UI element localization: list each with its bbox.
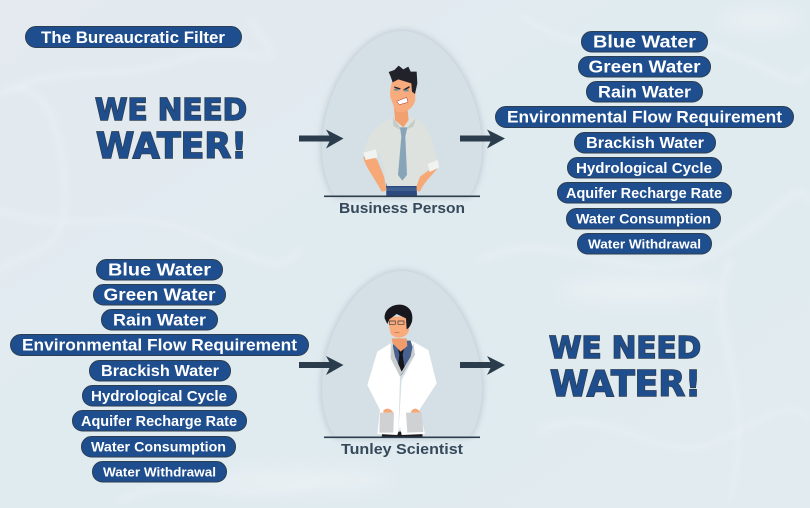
title pill: The Bureaucratic Filter — [41, 29, 226, 47]
jargon list: right: Blue Water — [593, 32, 696, 52]
jargon list: left: Hydrological Cycle — [91, 388, 227, 405]
jargon list: left: Blue Water — [108, 260, 211, 280]
baseline and label: scientist: Tunley Scientist — [341, 442, 463, 458]
jargon list: right: Water Withdrawal — [588, 236, 701, 252]
arrow: top left — [299, 130, 344, 148]
arrow: bottom right — [460, 356, 505, 375]
heading: we need water top: WE NEED — [95, 93, 247, 128]
jargon list: left: Aquifer Recharge Rate — [81, 414, 237, 430]
icon: scientist — [367, 305, 437, 437]
jargon list: right: Water Consumption — [576, 212, 711, 226]
baseline and label: business person: Business Person — [339, 201, 465, 217]
jargon list: right: Rain Water — [598, 82, 691, 102]
jargon list: left: Green Water — [104, 284, 216, 304]
egg: business person — [322, 31, 482, 196]
egg: scientist — [322, 271, 482, 437]
jargon list: right: Brackish Water — [586, 135, 704, 152]
jargon list: right: Environmental Flow Requirement — [507, 108, 783, 126]
heading: we need water bottom: WE NEED — [549, 331, 701, 366]
jargon list: left: Water Withdrawal — [103, 464, 216, 480]
jargon list: left: Rain Water — [113, 310, 206, 330]
jargon list: left — [10, 260, 308, 482]
heading: we need water bottom — [549, 331, 701, 405]
jargon list: right: Hydrological Cycle — [576, 160, 712, 177]
icon: business person — [363, 66, 439, 196]
jargon list: left: Environmental Flow Requirement — [22, 336, 298, 354]
heading: we need water top: WATER! — [96, 126, 247, 167]
arrow: bottom left — [299, 356, 344, 375]
jargon list: right: Green Water — [588, 56, 701, 76]
arrow: top right — [460, 130, 505, 148]
jargon list: right: Aquifer Recharge Rate — [566, 186, 722, 202]
heading: we need water bottom: WATER! — [550, 364, 701, 405]
jargon list: right — [496, 32, 794, 254]
jargon list: left: Brackish Water — [101, 363, 219, 380]
jargon list: left: Water Consumption — [91, 440, 226, 454]
heading: we need water top — [95, 93, 247, 167]
